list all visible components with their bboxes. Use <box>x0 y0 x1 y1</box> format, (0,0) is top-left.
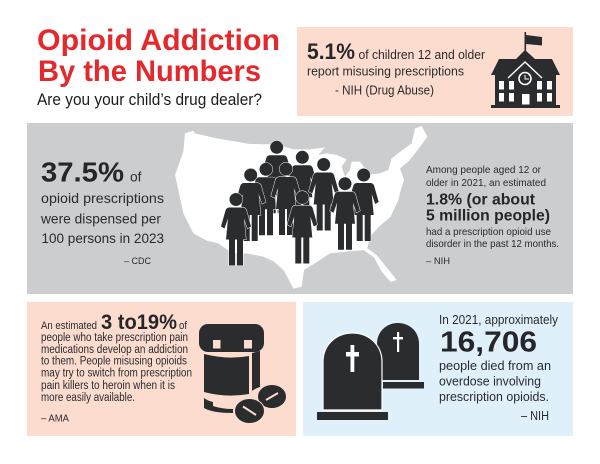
subtitle: Are you your child’s drug dealer? <box>37 91 262 109</box>
statistic text: pain killers to heroin when it is <box>41 380 175 392</box>
statistic: opioid use disorder: older in 2021, an estimated <box>426 177 546 189</box>
statistic text: An estimated <box>41 320 97 332</box>
statistic text <box>439 312 558 423</box>
person: middle left <box>251 163 281 235</box>
person: middle center <box>271 162 301 235</box>
statistic: opioid use disorder: disorder in the past 12 months. <box>426 238 559 250</box>
statistic: opioid use disorder: Among people aged 12 or <box>426 164 541 176</box>
statistic: prescriptions dispensed <box>40 157 164 267</box>
person: front left <box>221 193 251 266</box>
icon: school building <box>491 32 560 108</box>
statistic text: 5.1% <box>307 39 355 64</box>
statistic: opioid use disorder: 1.8% (or about <box>426 192 536 208</box>
statistic text: – NIH <box>521 408 549 423</box>
statistic text: report misusing prescriptions <box>307 64 464 78</box>
statistic text: overdose involving <box>439 374 541 389</box>
statistic: prescriptions dispensed: 100 persons in 2023 <box>42 230 164 246</box>
statistic text: of children 12 and older <box>358 48 485 62</box>
statistic text: 16,706 <box>440 327 537 359</box>
statistic text <box>41 310 192 425</box>
person: far right <box>349 168 379 241</box>
statistic text: people who take prescription pain <box>41 332 188 344</box>
statistic text: may try to switch from prescription <box>41 368 192 380</box>
title: Opioid Addiction <box>37 24 280 57</box>
statistic text: people died from an <box>439 358 551 373</box>
statistic text: In 2021, approximately <box>439 312 558 327</box>
panel: overdose deaths <box>303 302 573 436</box>
statistic text: - NIH (Drug Abuse) <box>335 84 434 98</box>
person: second right <box>330 177 360 250</box>
icon: gravestones <box>317 323 424 420</box>
statistic: prescriptions dispensed: opioid prescriptions <box>41 190 164 206</box>
icon: pill bottle <box>199 324 286 424</box>
person: front center <box>287 191 317 264</box>
person: back right <box>287 151 317 223</box>
panel: children statistic <box>297 27 573 116</box>
title <box>37 24 280 88</box>
people group <box>221 141 379 266</box>
statistic: opioid use disorder: – NIH <box>426 256 450 267</box>
panel: addiction statistic <box>27 302 296 436</box>
statistic: opioid use disorder: had a prescription opioid use <box>426 226 551 238</box>
person: middle right <box>309 158 339 230</box>
statistic: prescriptions dispensed: 37.5% <box>41 157 124 188</box>
statistic text: more easily available. <box>41 392 135 404</box>
statistic text: of <box>179 320 188 332</box>
statistic text: to them. People misusing opioids <box>41 356 187 368</box>
title: By the Numbers <box>38 55 261 88</box>
statistic text: 3 to19% <box>101 310 177 334</box>
statistic: prescriptions dispensed: of <box>130 169 142 185</box>
person: back center <box>262 141 292 213</box>
panel: prescriptions and map <box>27 123 573 294</box>
statistic: opioid use disorder: 5 million people) <box>426 208 550 225</box>
statistic: prescriptions dispensed: were dispensed per <box>40 210 161 226</box>
statistic: prescriptions dispensed: – CDC <box>124 256 151 267</box>
statistic text: medications develop an addiction <box>41 344 188 356</box>
person: second left <box>236 168 266 241</box>
statistic text: prescription opioids. <box>439 389 549 404</box>
statistic text: – AMA <box>41 413 69 425</box>
US map <box>175 126 427 289</box>
statistic: opioid use disorder <box>426 164 559 267</box>
statistic text <box>307 39 485 98</box>
